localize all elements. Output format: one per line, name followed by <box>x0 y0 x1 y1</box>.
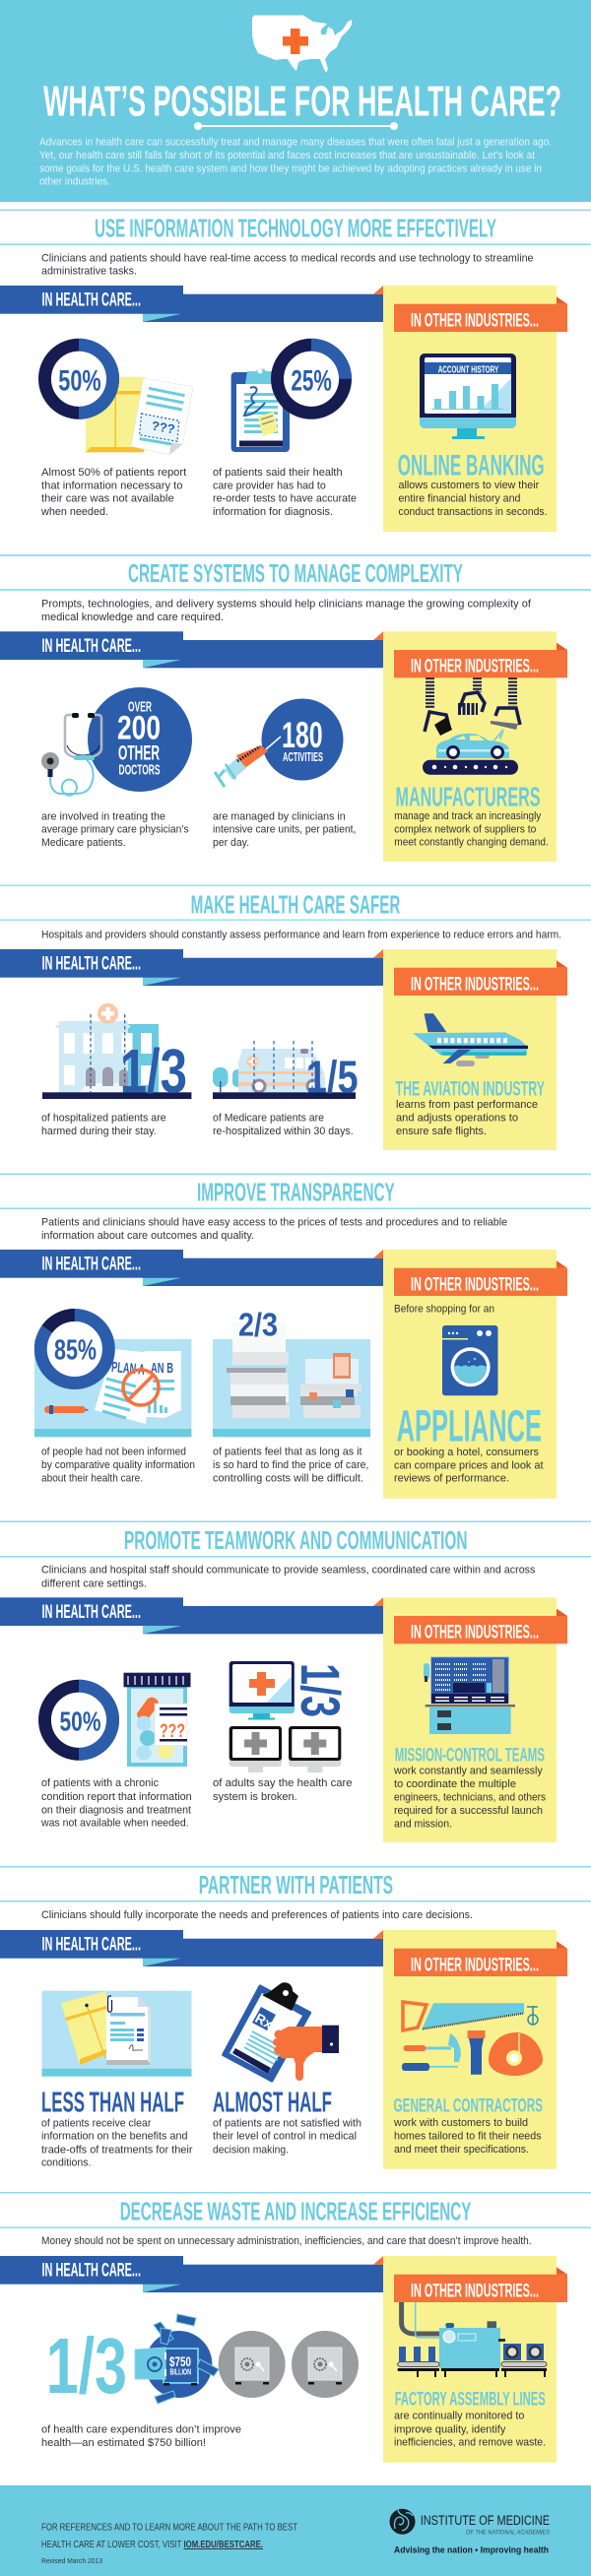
text: manufacturers description: complex network of suppliers to <box>394 823 536 835</box>
text: almost half description: of patients are not satisfied with <box>213 2118 361 2130</box>
icon: closed safe <box>292 2331 359 2398</box>
icon: hospital with 1/3 stat <box>42 1003 191 1106</box>
text: references: Revised March 2013 <box>41 2556 102 2565</box>
chart: 85 percent donut <box>40 1316 108 1383</box>
ribbon: in health care <box>0 286 383 322</box>
text: expenditures description <box>41 2423 241 2449</box>
text: almost half description <box>213 2118 361 2156</box>
ribbon: in other industries <box>373 2256 567 2302</box>
text: factory description: inefficiencies, and remove waste. <box>394 2437 546 2449</box>
panel: other industries <box>373 2256 567 2463</box>
text: mission control description: to coordinate the multiple <box>394 1778 516 1790</box>
text: 50 percent description: when needed. <box>40 506 108 518</box>
text: manufacturers description: meet constantly changing demand. <box>394 837 549 849</box>
text: factory description <box>394 2411 546 2449</box>
icon: ambulance with 1/5 stat <box>213 1041 359 1102</box>
label: almost half: ALMOST HALF <box>213 2087 332 2118</box>
text: manufacturers description <box>394 810 549 849</box>
chart: 50 percent donut <box>45 1686 112 1754</box>
section intro: Clinicians should fully incorporate the needs and preferences of patients into care decisions. <box>41 1909 473 1921</box>
text: 200 doctors description: are involved in treating the <box>41 810 165 822</box>
text: references: HEALTH CARE AT LOWER COST, VISIT IOM.EDU/BESTCARE. <box>41 2540 263 2550</box>
chart: 85 percent donut: 85% <box>54 1335 97 1367</box>
chart: 50 percent donut <box>45 345 112 413</box>
text: almost half description: decision making. <box>213 2144 289 2156</box>
ribbon: in health care: IN HEALTH CARE... <box>41 636 141 657</box>
text: less than half description: conditions. <box>41 2157 91 2168</box>
ribbon: in health care <box>0 949 383 986</box>
text: aviation description: and adjusts operations to <box>396 1113 518 1125</box>
heading: IMPROVE TRANSPARENCY <box>197 1178 395 1207</box>
text: 50 percent description: that information necessary to <box>41 480 183 491</box>
illustration: plans with no sign: PLAN A <box>110 1359 146 1379</box>
text: aviation description <box>396 1099 538 1137</box>
icon: hospital with 1/3 stat: 1/3 <box>120 1037 187 1106</box>
text: 200 doctors description: average primary care physician’s <box>41 824 189 836</box>
chart: 50 percent donut: 50% <box>59 1706 101 1736</box>
ribbon: in other industries <box>373 1597 567 1643</box>
section intro <box>41 1216 507 1242</box>
icon: open safe with $750 billion: BILLION <box>169 2368 191 2377</box>
ribbon: in health care <box>0 1250 383 1286</box>
logo: institute of medicine <box>390 2509 550 2556</box>
text: aviation description: learns from past performance <box>396 1099 538 1111</box>
label: less than half: LESS THAN HALF <box>41 2087 184 2118</box>
section intro <box>41 253 534 278</box>
icon: ambulance with 1/5 stat: 1/5 <box>306 1051 359 1102</box>
text: 50 percent description: Almost 50% of patients report <box>41 467 187 479</box>
text: chronic condition description: condition report that information <box>41 1791 192 1803</box>
panel: other industries <box>373 1930 567 2169</box>
icon: robotic arms and car <box>423 677 520 775</box>
ribbon: in health care <box>0 631 383 668</box>
chart: over 200 other doctors circle: 200 <box>117 710 161 747</box>
logo: institute of medicine: Advising the nation • Improving health <box>394 2545 549 2556</box>
ribbon: in health care <box>0 1597 383 1634</box>
text: 200 doctors description <box>41 810 189 849</box>
panel: header <box>0 0 591 202</box>
text: 1/3 adults description: of adults say the health care <box>213 1777 353 1789</box>
text: aviation description: ensure safe flights. <box>396 1126 487 1137</box>
ribbon: in health care <box>0 1930 383 1966</box>
chart: 180 activities circle: 180 <box>282 715 323 755</box>
text: 1/5 description <box>213 1113 354 1137</box>
illustration: envelope and form <box>41 1991 191 2077</box>
panel: other industries <box>373 631 567 862</box>
text: expenditures description: of health care expenditures don’t improve <box>41 2423 241 2435</box>
icon: clipboard with thumbs down <box>224 1982 339 2081</box>
text: 1/3 adults description: system is broken. <box>213 1791 297 1803</box>
text: appliance description: reviews of performance. <box>394 1473 509 1485</box>
icon: folder and document: ??? <box>151 419 176 436</box>
heading: MAKE HEALTH CARE SAFER <box>191 889 401 919</box>
logo: institute of medicine: INSTITUTE OF MEDICINE <box>421 2513 550 2528</box>
logo: institute of medicine: OF THE NATIONAL ACADEMIES <box>466 2529 550 2536</box>
text: before shopping: Before shopping for an <box>394 1304 494 1316</box>
text: 50 percent description: their care was not available <box>41 493 174 505</box>
text: 25 percent description: of patients said their health <box>213 467 343 479</box>
text: expenditures description: health—an estimated $750 billion! <box>41 2437 206 2449</box>
illustration: plans with no sign <box>34 1339 191 1437</box>
text: less than half description <box>41 2118 193 2168</box>
chart: over 200 other doctors circle: OTHER <box>118 741 160 765</box>
panel: other industries <box>373 286 567 532</box>
text: contractors description <box>393 2117 542 2156</box>
icon: pill jar <box>124 1673 191 1767</box>
chart: over 200 other doctors circle: OVER <box>128 699 152 716</box>
panel: make health care safer <box>0 884 591 1150</box>
text: 180 activities description: per day. <box>213 837 249 849</box>
text: factory description: improve quality, identify <box>394 2423 506 2435</box>
ribbon: in health care: IN HEALTH CARE... <box>41 954 141 975</box>
illustration: stacks of paper with 2/3: 2/3 <box>238 1307 278 1343</box>
icon: monitors with 1/3 stat <box>230 1661 352 1772</box>
text: contractors description: and meet their specifications. <box>394 2144 529 2156</box>
section intro: Money should not be spent on unnecessary administration, inefficiencies, and care that doesn’t improve health. <box>41 2235 532 2247</box>
chart: 25 percent donut <box>278 345 345 413</box>
text: 85 percent description: of people had not been informed <box>41 1446 186 1457</box>
text: factory description: are continually monitored to <box>394 2411 524 2422</box>
text: chronic condition description: of patients with a chronic <box>41 1777 159 1789</box>
text: appliance description: or booking a hotel, consumers <box>394 1447 539 1458</box>
text: less than half description: trade-offs of treatments for their <box>41 2144 193 2156</box>
ribbon: in other industries <box>373 1250 567 1296</box>
text: 2/3 description: controlling costs will be difficult. <box>213 1472 363 1484</box>
text: 85 percent description <box>41 1446 195 1484</box>
text: 50 percent description <box>40 467 187 518</box>
text: 180 activities description: intensive care units, per patient, <box>213 824 356 836</box>
text: 2/3 description: is so hard to find the price of care, <box>213 1459 368 1471</box>
illustration: plans with no sign: AN B <box>151 1360 173 1377</box>
panel: promote teamwork and communication <box>0 1520 591 1842</box>
text: 1/3 description: of hospitalized patients are <box>41 1113 166 1125</box>
icon: closed safe <box>219 2331 286 2398</box>
text: 25 percent description: re-order tests to have accurate <box>213 493 357 505</box>
icon: US map with cross <box>252 16 352 73</box>
icon: monitors with 1/3 stat: 1/3 <box>290 1663 352 1717</box>
ribbon: in other industries <box>373 949 567 996</box>
section intro: Clinicians and hospital staff should communicate to provide seamless, coordinated care within and across <box>41 1565 536 1577</box>
text: chronic condition description: was not available when needed. <box>40 1818 189 1830</box>
heading: PARTNER WITH PATIENTS <box>199 1870 393 1900</box>
text: appliance description: can compare prices and look at <box>394 1459 544 1471</box>
text: chronic condition description <box>40 1777 192 1830</box>
ribbon: in health care: IN HEALTH CARE... <box>41 2261 141 2282</box>
ribbon: in health care <box>0 2256 383 2292</box>
section intro: medical knowledge and care required. <box>41 612 224 623</box>
panel: other industries <box>373 949 567 1150</box>
text: 25 percent description <box>213 467 357 518</box>
ribbon: in health care: IN HEALTH CARE... <box>41 1935 141 1956</box>
ribbon: in health care: IN HEALTH CARE... <box>41 1602 141 1623</box>
text: online banking description: entire financial history and <box>398 492 520 504</box>
icon: syringe <box>215 737 281 787</box>
icon: mission control console <box>424 1657 515 1734</box>
chart: 50 percent donut: 50% <box>58 365 101 398</box>
panel: create systems to manage complexity <box>0 554 591 862</box>
icon: airplane <box>413 1013 528 1066</box>
section intro: Patients and clinicians should have easy access to the prices of tests and procedures and to reliable <box>41 1216 507 1228</box>
ribbon: in health care: IN HEALTH CARE... <box>41 1255 141 1275</box>
text: 1/3 description: harmed during their stay. <box>41 1126 157 1137</box>
panel: other industries <box>373 1597 567 1842</box>
icon: pill jar: ??? <box>160 1721 185 1742</box>
intro text: other industries. <box>39 176 110 188</box>
panel: use information technology <box>0 209 591 532</box>
panel: improve transparency <box>0 1174 591 1499</box>
icon: monitor account history <box>420 354 516 439</box>
text: 1/3 description <box>41 1113 166 1137</box>
chart: 25 percent donut: 25% <box>291 365 332 398</box>
illustration: stacks of paper with 2/3 <box>213 1307 370 1437</box>
text: 180 activities description: are managed by clinicians in <box>213 810 346 822</box>
text: less than half description: of patients receive clear <box>41 2118 152 2130</box>
text: mission control description: work constantly and seamlessly <box>393 1766 543 1777</box>
section intro: information about care outcomes and quality. <box>41 1230 254 1242</box>
text: mission control description: required for a successful launch <box>394 1805 543 1817</box>
text: 1/5 description: re-hospitalized within 30 days. <box>213 1126 354 1137</box>
intro text: Yet, our health care still falls far short of its potential and faces cost increases that are unsustainable. Let’s look at <box>39 150 536 161</box>
section intro: Prompts, technologies, and delivery systems should help clinicians manage the growing complexity of <box>41 599 532 611</box>
title underline <box>194 122 398 130</box>
ribbon: in other industries <box>373 631 567 677</box>
text: 25 percent description: care provider has had to <box>213 480 326 491</box>
text: contractors description: work with customers to build <box>393 2117 528 2129</box>
intro text: some goals for the U.S. health care system and how they might be achieved by adopting practices already in use in <box>39 163 542 175</box>
icon: clipboard <box>231 368 290 452</box>
text: manufacturers description: manage and track an increasingly <box>394 810 542 822</box>
icon: contractor tools <box>402 2002 543 2076</box>
icon: washing machine <box>442 1325 498 1395</box>
text: 2/3 description <box>213 1446 368 1484</box>
section intro <box>41 599 532 623</box>
icon: monitor account history: ACCOUNT HISTORY <box>438 363 498 375</box>
section intro: different care settings. <box>41 1578 147 1589</box>
text: online banking description: conduct transactions in seconds. <box>398 506 548 518</box>
icon: factory assembly line <box>398 2301 547 2377</box>
text: appliance description <box>394 1447 544 1485</box>
text: mission control description <box>393 1766 546 1830</box>
text: mission control description: and mission. <box>394 1818 452 1830</box>
text: 180 activities description <box>213 810 356 849</box>
text: mission control description: engineers, technicians, and others <box>394 1792 546 1804</box>
panel: other industries <box>373 1250 567 1499</box>
icon: open safe with $750 billion <box>135 2314 219 2404</box>
section intro: Clinicians and patients should have real-time access to medical records and use technology to streamline <box>41 253 534 265</box>
text: references: FOR REFERENCES AND TO LEARN MORE ABOUT THE PATH TO BEST <box>41 2522 297 2533</box>
text: less than half description: information on the benefits and <box>41 2131 187 2143</box>
chart: 180 activities circle <box>262 699 343 780</box>
text: 1/5 description: of Medicare patients are <box>213 1113 324 1125</box>
ribbon: in other industries <box>373 1930 567 1976</box>
text: 85 percent description: by comparative quality information <box>41 1459 195 1471</box>
text: almost half description: their level of control in medical <box>213 2131 357 2143</box>
section intro <box>41 1565 536 1589</box>
panel: footer <box>0 2485 591 2576</box>
text: chronic condition description: on their diagnosis and treatment <box>41 1804 192 1816</box>
chart: over 200 other doctors circle <box>88 687 192 792</box>
stat: 1/3: 1/3 <box>46 2322 127 2410</box>
panel: decrease waste and increase efficiency <box>0 2192 591 2463</box>
text: online banking description: allows customers to view their <box>398 480 539 491</box>
panel: partner with patients <box>0 1866 591 2169</box>
text: 2/3 description: of patients feel that as long as it <box>213 1446 362 1457</box>
icon: open safe with $750 billion: $750 <box>169 2353 191 2369</box>
section intro: administrative tasks. <box>41 266 137 278</box>
chart: 180 activities circle: ACTIVITIES <box>283 750 323 764</box>
chart: over 200 other doctors circle: DOCTORS <box>118 762 160 779</box>
icon: stethoscope <box>41 713 101 796</box>
text: references <box>41 2522 297 2565</box>
text: 85 percent description: about their health care. <box>41 1472 143 1484</box>
text: online banking description <box>398 480 548 518</box>
ribbon: in other industries <box>373 286 567 332</box>
icon: clipboard with thumbs down: Rx <box>252 2010 276 2032</box>
intro text <box>39 137 552 188</box>
text: contractors description: homes tailored to fit their needs <box>394 2131 542 2143</box>
text: 25 percent description: information for diagnosis. <box>213 506 333 518</box>
ribbon: in health care: IN HEALTH CARE... <box>41 290 141 311</box>
text: 200 doctors description: Medicare patients. <box>41 837 126 849</box>
icon: folder and document <box>86 377 193 455</box>
text: 1/3 adults description <box>213 1777 353 1803</box>
